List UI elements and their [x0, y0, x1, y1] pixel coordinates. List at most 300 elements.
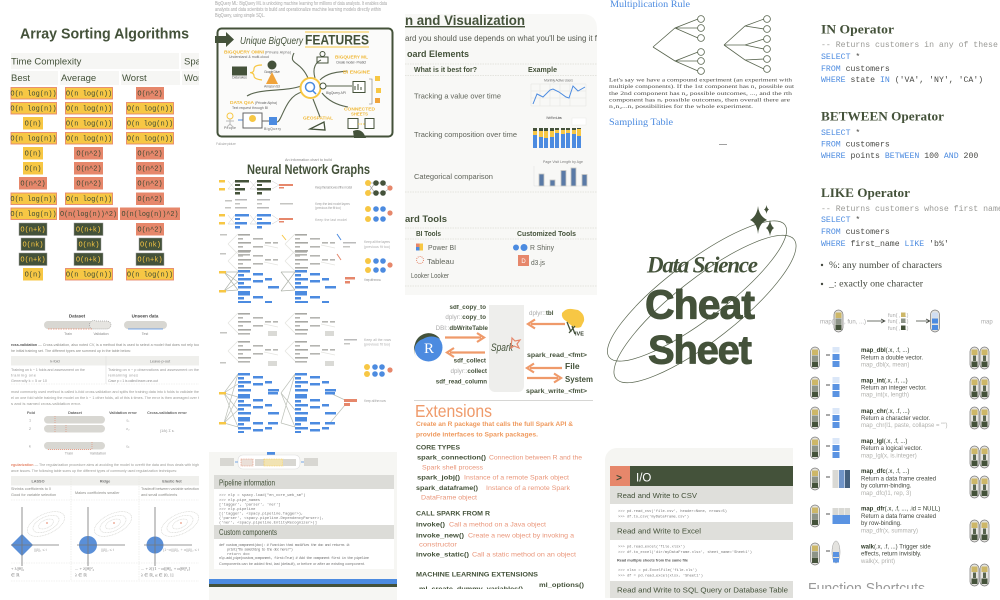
code: IN: -- Returns customers in any of these: [821, 40, 998, 50]
fold table: Cross-validation error: [147, 411, 187, 415]
arrows: [445, 320, 565, 382]
paragraph: multiple components). If the 1st component has n₁ possible out: [609, 83, 795, 90]
code: LIKE: SELECT *: [821, 215, 860, 225]
table: LASSO ridge elastic net: Ridge: [100, 480, 110, 484]
icon: hive: IVE: [575, 332, 584, 338]
tree diagrams: [653, 16, 770, 74]
functions: from sources: [526, 310, 593, 395]
complexity pills: O(n^2): [76, 150, 102, 158]
chart: stacked bars: [533, 116, 586, 148]
complexity pills: O(n+k): [137, 256, 163, 264]
function descriptions: Return a data frame created: [861, 514, 936, 520]
paragraph: Let's say we have a compound experiment (an experiment with: [609, 76, 792, 84]
heading: IN Operator: IN Operator: [821, 22, 894, 36]
function descriptions: Return an integer vector.: [861, 386, 927, 392]
fold table: Fold: [27, 411, 36, 415]
code: Excel: [610, 540, 800, 581]
footer bars: [209, 579, 397, 587]
complexity pills: O(n(log(n))^2): [122, 210, 178, 219]
code: custom components: def custom_component(doc): # Function that modifies the doc and returns it: [219, 543, 350, 548]
fold table: 2: [29, 427, 31, 431]
dataset diagrams: Test: [142, 332, 148, 336]
panel background: [605, 448, 805, 600]
table: elements: Tracking composition over time: [414, 130, 517, 139]
code: custom components: nlp.add_pipe(custom_component, first=True) # Add the component first in the pipeline: [219, 556, 370, 561]
header: I/O: I/O: [636, 472, 651, 484]
code: pipeline: [('tagger', <spacy.pipeline.Tagger>),: [219, 512, 303, 516]
code: Excel: >>> df = pd.read_excel(xlsx, 'Sheet1'): [618, 574, 703, 578]
band: CSV: Read and Write to CSV: [617, 491, 697, 500]
table: tools: [405, 228, 597, 286]
panel: SQL operators: [821, 22, 1000, 288]
complexity pills: O(n^2): [76, 180, 102, 188]
table: elements: [405, 64, 597, 192]
code: pipeline: ('ner', <spacy.pipeline.EntityRecognizer>)]: [219, 520, 317, 526]
chart: line: Monthly Active Users: [544, 78, 573, 82]
table: LASSO ridge elastic net: ||β||₁ ≤ t: [34, 548, 48, 552]
table: elements: Categorical comparison: [414, 172, 493, 181]
code: BETWEEN: WHERE points BETWEEN 100 AND 200: [821, 151, 978, 161]
network row: blue: Keep the last model: [315, 218, 347, 222]
network row: dark: [219, 180, 352, 210]
complexity pills: O(n): [25, 272, 41, 280]
network row: blue lower: [219, 373, 386, 433]
functions list: spark_jobj(): [417, 474, 460, 482]
table header: Worst: [184, 73, 209, 84]
table: LASSO ridge elastic net: Elastic Net: [162, 480, 182, 484]
icon: arrow: [215, 32, 234, 47]
table: k-fold vs leave-p-out: [11, 356, 199, 384]
code: pipeline: ['tagger', 'parser', 'ner']: [219, 502, 281, 508]
header: I/O: [610, 466, 800, 486]
labels: SHEETS: [351, 112, 368, 116]
complexity pills: O(n log(n)): [127, 136, 173, 144]
dataset diagrams: [44, 314, 167, 336]
function descriptions: Return a data frame created: [861, 476, 936, 482]
code: IN: FROM customers: [821, 65, 890, 74]
paragraph: n₁n₂...nᵣ possibilities for the whole experiment.: [609, 103, 753, 110]
functions list: ml_create_dummy_variables(): [419, 586, 523, 593]
heading: sampling table: Sampling Table: [609, 117, 673, 127]
network row: grey lower: Keep all the rows: [364, 338, 391, 342]
code: CSV: >>> df.to_csv('myDataFrame.csv'): [618, 514, 689, 520]
band: custom components: Custom components: [219, 528, 277, 537]
sketch title: [240, 32, 369, 48]
panel: BigQuery features sketch: BigQuery: [264, 127, 281, 131]
table: tools: Looker Looker: [411, 271, 449, 280]
network row: blue wide: Keep all the rows: [364, 278, 381, 282]
code: Excel: >>> xlsx = pd.ExcelFile('file.xls'): [618, 568, 697, 573]
functions: to spark: sdf_read_column: [436, 378, 487, 386]
complexity pills: O(nk): [140, 242, 161, 250]
functions list: Connection between R and the: [489, 454, 582, 462]
sketch frame: [218, 28, 392, 136]
complexity pills: O(n log(n)): [66, 90, 112, 98]
dataset diagrams: Train: [64, 332, 72, 336]
functions: to spark: sdf_copy_to: [450, 304, 486, 311]
function descriptions: map_int(.x, .f, ...): [861, 378, 908, 384]
code: custom components: Components can be added first, last (default), or before or after an existing component.: [219, 561, 365, 566]
function descriptions: Return a logical vector.: [861, 446, 922, 452]
complexity pills: O(n): [25, 166, 41, 174]
bullets: _: exactly one character: [828, 278, 923, 288]
fold table: Train: [65, 452, 73, 456]
complexity pills: O(n log(n)): [66, 272, 112, 280]
table: k-fold vs leave-p-out: Training on n − p observations and assessment on the: [108, 368, 199, 372]
functions: to spark: sdf_collect: [454, 358, 486, 364]
code: IN: [821, 40, 998, 85]
panel: BigQuery features sketch: Text request through BI: [232, 106, 268, 110]
complexity pills: O(n^2): [137, 226, 163, 234]
functions list: constructor: [419, 542, 458, 548]
spark block: [489, 305, 524, 392]
panel: multiplication rule: [609, 0, 795, 144]
table: LASSO ridge elastic net: ... + λ[(1 − α)||θ||₁ + α||θ||²₂]: [141, 566, 190, 571]
table: k-fold vs leave-p-out: Training on k − 1 folds and assessment on the: [11, 368, 85, 372]
panel: BigQuery features sketch: Create model · Predict: [336, 60, 366, 64]
code: LIKE: [821, 204, 1000, 249]
code: Excel: Read multiple sheets from the same file: [617, 558, 688, 562]
regularization plots: [27, 511, 199, 537]
map overview: fun( , ...): [888, 326, 909, 332]
mini icons: [226, 52, 381, 138]
paragraph: the 2nd component has n₂ possible outcomes, ..., and the rth: [609, 91, 792, 97]
complexity pills: O(n^2): [76, 164, 102, 174]
functions: to spark: dplyr::copy_to: [445, 314, 486, 321]
table: k-fold vs leave-p-out: k-fold: [50, 360, 60, 364]
fold table: [27, 411, 187, 456]
functions list: Call a method on a Java object: [449, 522, 546, 528]
functions: from sources: spark_read_<fmt>: [527, 352, 587, 359]
output vectors: [832, 347, 850, 563]
table header: Space: [184, 56, 211, 68]
complexity pills: O(n log(n)): [10, 90, 57, 98]
table: LASSO ridge elastic net: + λ||θ||₁: [11, 566, 25, 571]
function descriptions: walk(x, print): [860, 559, 895, 565]
fold table: Validation: [90, 452, 106, 456]
functions: from sources: System: [565, 374, 593, 384]
complexity pills: O(n log(n)): [127, 106, 173, 114]
band: CSV: [610, 486, 800, 504]
function descriptions: effects, return invisibly.: [861, 552, 922, 558]
table: LASSO ridge elastic net: Makes coefficients smaller: [75, 491, 120, 495]
table: k-fold vs leave-p-out: Leave-p-out: [150, 360, 171, 364]
functions list: invoke(): [416, 522, 445, 528]
network row: grey wide: Keep all the layers: [364, 240, 390, 244]
text: regularization: egularization — The regularization procedure aims at avoiding the model to overfit the data and thus deals with high: [11, 462, 215, 467]
code: BETWEEN: SELECT *: [821, 128, 860, 138]
complexity pills: O(n(log(n))^2): [60, 210, 117, 219]
function descriptions: Return a double vector.: [861, 356, 923, 362]
table: tools: D: [521, 259, 526, 265]
complexity pills: O(n log(n)): [66, 136, 112, 144]
network node diagrams: [364, 180, 393, 377]
code: LIKE: WHERE first_name LIKE 'b%': [821, 239, 949, 249]
table: elements: Example: [528, 67, 557, 74]
panel: BigQuery features sketch: (Private Alpha): [265, 50, 291, 54]
network row: grey lower: [220, 313, 391, 366]
function descriptions: map_dfr(x, summary): [861, 528, 918, 534]
complexity pills: [10, 87, 180, 280]
functions list: Instance of a remote Spark object: [464, 474, 569, 482]
heading: function shortcuts: Function Shortcuts: [808, 581, 925, 597]
complexity pills: O(n+k): [76, 226, 101, 234]
fold table: 1: [29, 418, 31, 422]
map overview: map(: [820, 320, 834, 326]
fold table: ε₂: [126, 427, 130, 431]
panel: pandas I/O: [605, 448, 805, 600]
code: Excel: >>> pd.read_excel('file.xlsx'): [618, 544, 685, 550]
code: custom components: print("Do something to the doc here!"): [227, 548, 293, 552]
input capsules: [810, 347, 830, 565]
table header: Worst: [122, 73, 147, 84]
intro text: BigQuery ML: BigQuery ML is unlocking machine learning for millions of data analysts. It enables data: [215, 1, 387, 7]
code: BETWEEN: [821, 128, 978, 161]
text: cv explanation: el on one fold while training the model on the k − 1 other folds, all of this k times. The error is then averaged over t: [11, 395, 200, 400]
panel background: [405, 14, 597, 295]
table header: Average: [61, 73, 96, 84]
complexity pills: O(n^2): [137, 150, 163, 158]
table: tools: Tableau: [427, 257, 454, 266]
complexity pills: O(n log(n)): [10, 211, 57, 219]
table: tools: Power BI: [428, 243, 456, 252]
panel: sparklyr: [414, 295, 593, 593]
code: pipeline: [214, 489, 394, 526]
panel: BigQuery features sketch: Google Drive: [264, 70, 280, 74]
labels: GEOSPATIAL: [303, 116, 333, 120]
function descriptions: map_dfr(.x, .f, ..., .id = NULL): [861, 506, 940, 512]
functions list: CORE TYPES: [416, 444, 461, 452]
complexity pills: O(nk): [22, 242, 44, 250]
subheading: elements: oard Elements: [407, 49, 469, 60]
table: k-fold vs leave-p-out: training one: [11, 374, 36, 378]
panel: BigQuery features sketch: [215, 1, 392, 146]
functions list: Create a new object by invoking a: [468, 532, 574, 540]
network row: blue wide: [219, 270, 381, 303]
table: k-fold vs leave-p-out: Case p = 1 is called leave-one-out: [108, 379, 159, 383]
function descriptions: map_lgl(.x, .f, ...): [861, 439, 907, 445]
functions list: Spark shell process: [422, 464, 484, 472]
title: Array Sorting Algorithms: Array Sorting Algorithms: [20, 26, 189, 42]
map overview: map: [981, 320, 993, 326]
table header: [11, 53, 211, 85]
functions list: spark_dataframe(): [416, 485, 478, 492]
intro text: BigQuery, using simple SQL.: [215, 13, 265, 19]
table: elements: What is it best for?: [414, 67, 477, 74]
caption: Full-size picture: [216, 142, 236, 146]
map overview: fun( , ...): [888, 319, 909, 325]
complexity pills: O(n log(n)): [127, 272, 173, 280]
panel: BigQuery features sketch: BigQuery API: [326, 91, 346, 95]
band: SQL: Read and Write to SQL Query or Database Table: [617, 586, 788, 594]
fold table: Validation error: [109, 411, 137, 415]
table: LASSO ridge elastic net: ||β||₂ ≤ t: [101, 548, 115, 552]
pipeline diagram: [220, 452, 318, 469]
functions list: [416, 444, 584, 593]
function descriptions: map_chr(l1, paste, collapse = ""): [861, 423, 947, 429]
function descriptions: map_chr(.x, .f, ...): [861, 409, 910, 415]
functions: to spark: dplyr::collect: [451, 368, 487, 375]
table: LASSO ridge elastic net: Tradeoff between variable selection: [141, 487, 199, 491]
function descriptions: map_dfc(l1, rep, 3): [861, 491, 911, 497]
table: tools: d3.js: [531, 258, 545, 267]
table: tools: Customized Tools: [517, 231, 576, 238]
function descriptions: walk(.x, .f, ...) Trigger side: [860, 544, 931, 550]
functions: from sources: File: [565, 361, 580, 371]
functions list: invoke_new(): [416, 532, 464, 540]
panel background: [209, 452, 397, 600]
panel: array sorting algorithms: [10, 26, 211, 280]
complexity pills: O(n+k): [20, 226, 46, 234]
heading: LIKE Operator: LIKE Operator: [821, 186, 910, 200]
panel: BigQuery features sketch: Data lakes: [232, 76, 247, 80]
functions: to spark: DBI::dbWriteTable: [436, 325, 489, 332]
network row: blue lower: Keep all the rows: [364, 399, 386, 403]
chart: bars: Page Visit Length by Age: [543, 160, 583, 164]
function descriptions: by column-binding.: [861, 484, 912, 490]
band: SQL: [610, 581, 800, 598]
complexity pills: O(n^2): [137, 180, 163, 188]
table: tools: R Shiny: [530, 243, 554, 252]
code: Excel: >>> df.to_excel('dir/myDataFrame.xlsx', sheet_name='Sheet1'): [618, 550, 752, 555]
table: LASSO ridge elastic net: Good for variable selection: [11, 493, 56, 497]
text: cv explanation: s and is named cross-validation error.: [11, 401, 81, 406]
title: Neural Network Graphs: Neural Network Graphs: [247, 161, 370, 177]
table: k-fold vs leave-p-out: Generally k = 5 or 10: [11, 379, 47, 383]
functions list: invoke_static(): [416, 552, 469, 558]
panel: BigQuery features sketch: People: [224, 126, 236, 130]
bullets: %: any number of characters: [829, 260, 943, 270]
sketch title: Unique BigQuery: [240, 35, 304, 47]
complexity pills: O(n+k): [76, 256, 101, 264]
table header: Best: [11, 73, 30, 84]
code: pipeline: >>> nlp.pipe_names: [219, 498, 260, 503]
spark block: Spark: [491, 342, 513, 354]
labels: BIGQUERY OMNI: [224, 50, 264, 54]
panel: BigQuery features sketch: (Private Alpha): [255, 101, 277, 105]
table: LASSO ridge elastic net: Shrinks coefficients to 0: [11, 487, 51, 491]
complexity pills: O(n): [25, 150, 41, 158]
band: custom components: [214, 525, 394, 539]
labels: DATA QnA: [230, 100, 255, 105]
panel: dashboard visualization: [405, 12, 598, 295]
code: custom components: [214, 539, 394, 569]
bullets: [821, 260, 943, 288]
code: LIKE: -- Returns customers whose first name: [821, 204, 1000, 214]
text: cross-validation: ross-validation — Cross-validation, also noted CV, is a method that is used to select a model that does not rely too: [11, 342, 213, 347]
icon: R: [414, 333, 442, 362]
table: LASSO ridge elastic net: and small coefficients: [141, 493, 177, 497]
labels: BIGQUERY ML: [335, 54, 368, 60]
band: pipeline information: [214, 475, 394, 489]
fold table: (1/k) Σ εᵢ: [160, 429, 175, 433]
header: I/O: >: [616, 473, 622, 484]
panel: BigQuery features sketch: Amazon S3: [264, 84, 280, 88]
labels: BI ENGINE: [343, 70, 370, 74]
panel: BigQuery features sketch: Understand & multi-cloud: [229, 55, 269, 59]
paired capsules: [970, 347, 989, 586]
complexity pills: O(nk): [78, 242, 100, 250]
chart: line: [531, 78, 586, 106]
dataset diagrams: Dataset: [69, 314, 86, 318]
function descriptions: Return a character vector.: [861, 416, 930, 422]
table: LASSO ridge elastic net: λ ∈ ℝ, α ∈ [0, 1]: [141, 572, 174, 578]
table: LASSO ridge elastic net: [11, 476, 202, 581]
complexity pills: O(n+k): [20, 256, 46, 264]
map overview: , fun, ...): [844, 320, 866, 326]
functions list: DataFrame object: [421, 494, 477, 502]
network row: dark: Keep the last rows of the model: [315, 186, 352, 190]
map overview: fun( , ...): [888, 313, 909, 319]
network row: dark: (previous the fit too): [315, 206, 341, 210]
network row: grey lower: (previous fit too): [364, 342, 390, 346]
intro line: ard you should use depends on what you'll be using it f: [405, 34, 598, 43]
complexity pills: O(n^2): [137, 195, 163, 204]
panel: neural network graphs: [219, 157, 393, 442]
fold table: ε₁: [127, 418, 130, 422]
text: regularization: ance issues. The following table sums up the different types of commonly used regularization techniques:: [11, 468, 177, 473]
intro: Create an R package that calls the full Spark API &: [416, 421, 573, 428]
panel: purrr map functions: [808, 310, 993, 597]
code: IN: WHERE state IN ('VA', 'NY', 'CA'): [821, 75, 983, 85]
complexity pills: O(n log(n)): [66, 120, 112, 128]
heading: BETWEEN Operator: BETWEEN Operator: [821, 110, 944, 124]
word: Sheet: Sheet: [648, 328, 752, 372]
labels: [224, 50, 376, 120]
subheading: tools: ard Tools: [405, 214, 447, 225]
band: Excel: [610, 522, 800, 540]
code: LIKE: FROM customers: [821, 228, 890, 237]
code: pipeline: >>> nlp = spacy.load("en_core_web_sm"): [219, 493, 306, 498]
paragraph: component has nᵣ possible outcomes, then overall there are: [609, 98, 791, 104]
network row: grey wide: (previous fit too): [364, 245, 390, 249]
table: tools: BI Tools: [416, 231, 441, 238]
chart: stacked bars: Web Form Users: [546, 116, 562, 120]
network row: dark: Keep the last model layers: [315, 202, 350, 206]
intro: provide interfaces to Spark packages.: [416, 432, 538, 438]
table: LASSO ridge elastic net: LASSO: [31, 480, 45, 484]
table: k-fold vs leave-p-out: remaining ones: [108, 374, 138, 378]
functions list: Instance of a remote Spark: [486, 485, 571, 492]
complexity pills: O(n log(n)): [10, 196, 57, 204]
band: pipeline information: Pipeline information: [219, 478, 275, 488]
function descriptions: map_lgl(x, is.integer): [861, 454, 917, 460]
table: elements: Tracking a value over time: [414, 92, 501, 100]
functions list: spark_connection(): [417, 454, 486, 462]
complexity pills: O(n log(n)): [66, 106, 112, 114]
script: Data Science: Data Science: [646, 252, 758, 278]
panel: sklearn pipeline: [209, 452, 397, 600]
map overview: [820, 310, 993, 332]
function descriptions: map_dbl(.x, .f, ...): [861, 348, 909, 354]
fold table: k: [29, 444, 31, 448]
icon: R: R: [424, 341, 434, 357]
functions list: CALL SPARK FROM R: [416, 510, 490, 518]
code: IN: SELECT *: [821, 52, 860, 62]
code: CSV: [610, 504, 800, 522]
code: BETWEEN: FROM customers: [821, 140, 890, 150]
network row: blue: [219, 214, 347, 228]
text: cross-validation: he initial training set. The different types are summed up in the table below:: [11, 348, 131, 353]
sketch title: FEATURES: [305, 32, 369, 48]
subtitle: An information chart to build: [285, 157, 332, 162]
chart: bars: [534, 160, 588, 186]
complexity pills: O(n log(n)): [66, 196, 112, 204]
code: pipeline: >>> nlp.pipeline: [219, 507, 256, 512]
BigQuery centre icon and spokes: [247, 53, 352, 122]
panel: cross-validation and regularization: [11, 314, 202, 581]
table: LASSO ridge elastic net: λ ∈ ℝ: [75, 572, 87, 578]
